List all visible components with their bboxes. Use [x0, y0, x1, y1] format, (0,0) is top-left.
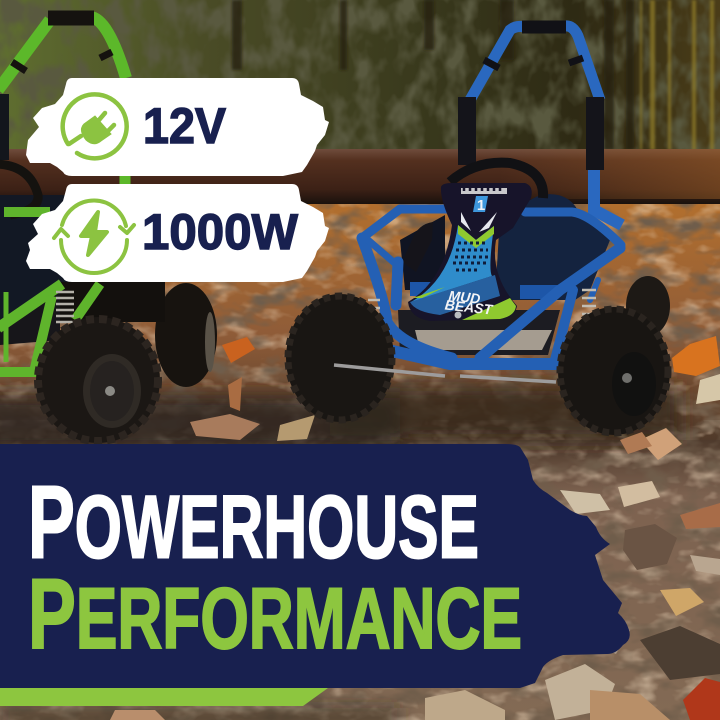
green kart steering wheel	[0, 164, 38, 215]
value: 12V: 12V	[143, 98, 227, 154]
badge: 12V	[26, 78, 329, 176]
title line 2: PERFORMANCE	[28, 558, 522, 669]
title line 1: POWERHOUSE	[28, 464, 479, 580]
blue kart steering wheel	[450, 163, 543, 198]
blue kart left front tire	[286, 294, 394, 422]
seat logo: MUD	[448, 287, 481, 307]
blue kart roll bar	[467, 26, 622, 225]
green kart spring	[56, 292, 74, 322]
green kart body shadow	[0, 195, 160, 320]
blue kart rear right tire	[626, 276, 670, 336]
autumn leaves	[110, 336, 720, 720]
background photo: forest clearing	[0, 0, 720, 155]
seat number 1 badge	[473, 196, 488, 212]
seat white darts	[461, 212, 497, 232]
green kart rear tire	[155, 283, 217, 387]
green kart front tire	[36, 317, 160, 443]
badge: 1000W	[26, 184, 329, 282]
value: 1000W: 1000W	[142, 204, 299, 260]
seat dotted mesh	[453, 243, 488, 270]
seat blue panel	[411, 225, 494, 302]
blue kart right front tire	[558, 307, 670, 435]
icon: plug in circle	[63, 94, 127, 158]
blue kart racing seat: BEAST	[444, 297, 494, 318]
icon: bolt with cycle arrows	[54, 201, 134, 273]
blue kart tie rods	[334, 365, 556, 382]
blue kart frame tubes	[362, 209, 621, 364]
title panel: navy torn shape	[0, 444, 630, 688]
background photo: leaf-covered ground	[0, 204, 720, 720]
badge background	[26, 78, 329, 176]
seat checkered strip	[461, 188, 507, 194]
green kart frame tubes	[0, 212, 100, 372]
green go-kart (left, partly hidden)	[0, 17, 217, 443]
badge background	[26, 184, 329, 282]
tree trunks	[232, 0, 714, 150]
green kart roll bar	[0, 20, 50, 90]
background photo: fallen log	[0, 149, 720, 205]
blue go-kart (centre)	[286, 26, 670, 435]
blue kart racing seat	[408, 183, 532, 321]
seat lime chevrons	[458, 225, 494, 248]
dark dust band under the karts	[0, 385, 680, 720]
blue kart seat shell shadow	[495, 194, 610, 300]
blue kart racing seat: 1	[477, 197, 485, 214]
blue kart springs	[368, 290, 596, 340]
green underline strip	[0, 688, 328, 706]
blue kart floor plate	[398, 310, 560, 355]
